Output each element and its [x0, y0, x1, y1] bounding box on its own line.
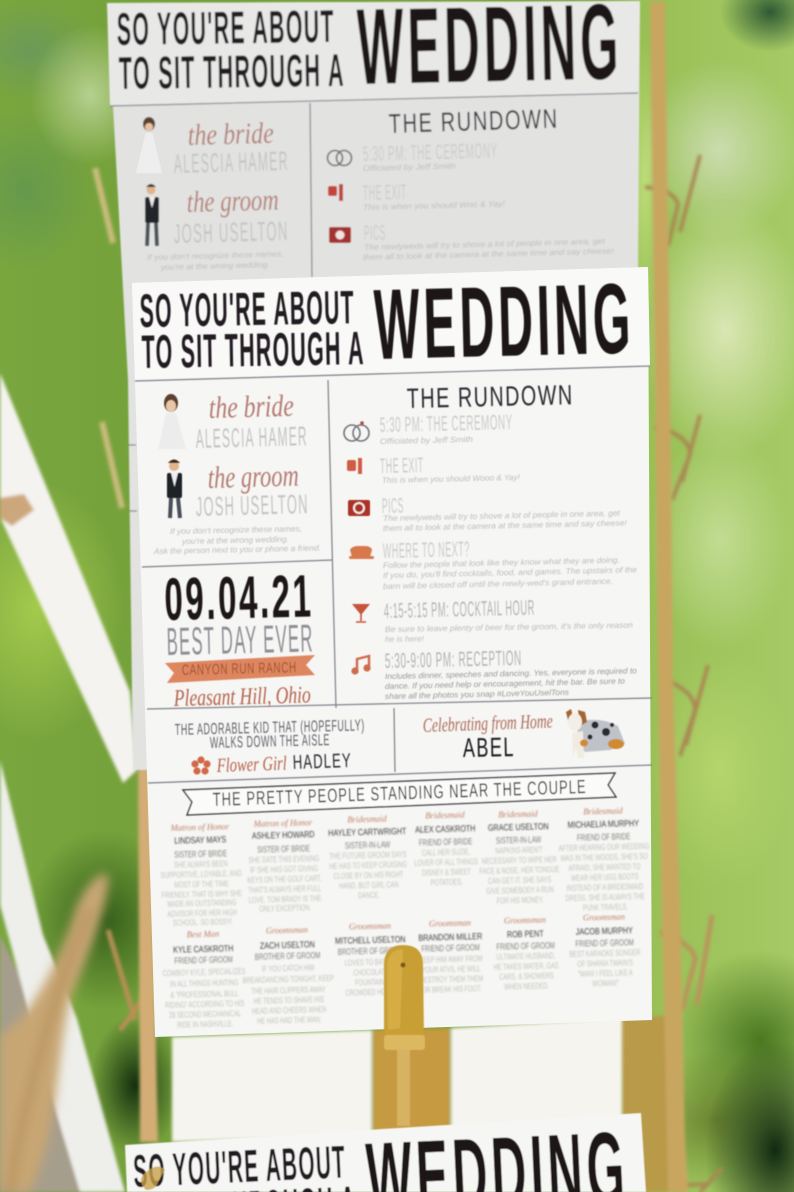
bridesmaid: Hayley: SISTER-IN-LAW: [345, 839, 391, 851]
groomsman: Mitchell: MITCHELL USELTON: [335, 934, 406, 946]
groomsman: Zach: HE HAS HAD THE MAN.: [257, 1014, 322, 1026]
bride and groom names: the bride: [208, 388, 294, 425]
card header band: [132, 267, 650, 381]
groomsman: Brandon: [418, 917, 484, 995]
matron of honor: Lindsay: ADVISOR FOR HER HIGH: [167, 907, 237, 919]
bridesmaid: Hayley: CLOSE BY ON HIS RIGHT: [333, 869, 404, 881]
back card rundown: The newlyweds will try to shove a lot of people in one area, get: [364, 237, 606, 252]
groomsman: Zach: HE TENDS TO SHAVE HIS: [253, 994, 324, 1006]
groomsman: Rob: CARS, & SHOWERS: [499, 970, 554, 982]
venue ribbon: [165, 655, 315, 683]
groomsman: Brandon: KEEP HIM AWAY FROM: [419, 953, 483, 965]
where to next item: barn will be closed off until the newly-wed's grand entrance.: [383, 577, 613, 591]
panel: couple: [153, 388, 321, 556]
groomsman: Rob: HE TAKES WATER, GAS: [493, 960, 559, 972]
bridesmaid: Alex: ALEX CASKROTH: [415, 823, 476, 835]
back card: ALESCIA HAMER: [173, 146, 289, 179]
matron of honor: Ashley: LOVE. TOM BRADY IS THE: [248, 893, 321, 905]
bridesmaid: Grace: Bridesmaid: [498, 808, 538, 820]
best man: Kyle: RIDING" ACCORDING TO HIS: [165, 998, 245, 1010]
cocktail hour item: [384, 597, 634, 644]
side card, lower left: [0, 760, 125, 1192]
groomsman: Zach: [241, 924, 335, 1027]
venue ribbon: CANYON RUN RANCH: [182, 659, 297, 679]
bridesmaid: Michaelia: FRIEND OF BRIDE: [577, 831, 630, 843]
back card bride figure: [135, 117, 163, 174]
icon: bride: [158, 394, 186, 449]
icon: where to next: [349, 546, 374, 559]
best man: Kyle: [161, 928, 247, 1030]
card paper: [132, 267, 652, 1037]
icon: exit: [347, 458, 362, 474]
best man: Kyle: KYLE CASKROTH: [173, 943, 234, 955]
bridesmaid: Alex: DISNEY & SWEET: [422, 866, 471, 878]
white display board: [172, 1018, 622, 1142]
reception item: Includes dinner, speeches and dancing. Yes, everyone is required to: [385, 666, 638, 681]
groomsman: Mitchell: CROWDED HOUSE: [345, 986, 398, 998]
bridesmaid: Michaelia: DRESS. SHE IS ALWAYS THE: [565, 891, 645, 903]
groomsman: Rob: ROB PENT: [507, 929, 544, 940]
best man: Kyle: COWBOY KYLE, SPECIALIZES: [162, 966, 246, 978]
back card groom figure: [145, 184, 159, 246]
back card rundown: PICS: [364, 221, 386, 245]
best man: Kyle: 28 SECOND MECHANICAL: [169, 1008, 241, 1020]
bridesmaid: Grace: CAN GET IT. SHE SAYS: [488, 874, 552, 886]
reception item: dance. If you need help or encouragement, hit the bar. Be sure to: [385, 677, 626, 691]
back card: JOSH USELTON: [173, 216, 289, 249]
panel: flower girl: [175, 717, 365, 777]
groomsman: Mitchell: [335, 920, 407, 998]
groomsman: Brandon: FRIEND OF GROOM: [421, 942, 480, 954]
panel: flower girl: HADLEY: [292, 750, 352, 774]
icon: music note: [353, 656, 369, 673]
back card rundown: Officiated by Jeff Smith: [363, 162, 457, 173]
back card couple names: you're at the wrong wedding.: [160, 260, 270, 272]
bridesmaid: Hayley: DANCE.: [358, 890, 380, 901]
where to next item: Follow the people that look like they know what they are doing.: [383, 556, 620, 570]
wedding party banner: THE PRETTY PEOPLE STANDING NEAR THE COUPLE: [212, 777, 587, 811]
best man: Kyle: FRIEND OF GROOM: [174, 954, 233, 966]
matron of honor: Ashley: ONLY EXCEPTION.: [259, 902, 311, 914]
bridesmaid: Hayley: HAND, BUT GIRL CAN: [339, 879, 399, 891]
panel: celebrating from home: [422, 709, 625, 763]
icon: groom: [167, 460, 182, 518]
bridesmaid: Grace: FOR HIS MONEY.: [497, 894, 544, 906]
groomsman: Rob: ULTIMATE HUSBAND,: [496, 950, 556, 962]
wrong wedding note: If you don't recognize these names,: [170, 524, 302, 536]
bridesmaid: Grace: GIVE SOMEBODY A RUN: [486, 884, 554, 896]
main title: [139, 263, 635, 381]
pics item: [382, 495, 628, 533]
bridesmaid: Alex: LOVER OF ALL THINGS: [414, 856, 478, 868]
back card: [107, 0, 640, 770]
groomsman: Zach: BREAKDANCING TONIGHT, KEEP: [242, 973, 334, 986]
groomsman: Rob: WHEN NEEDED.: [504, 980, 549, 992]
groomsman: Brandon: YOUR ATVS, HE WILL: [422, 963, 481, 975]
pics item: them all to look at the camera at the same time and say cheese!: [383, 518, 628, 533]
bridesmaid: Hayley: [328, 813, 408, 901]
matron of honor: Lindsay: MOST OF THE TIME: [174, 878, 229, 890]
matron of honor: Ashley: [246, 817, 322, 914]
panel: flower girl: THE ADORABLE KID THAT (HOPEFULLY): [175, 717, 365, 739]
back card icon: camera: [329, 227, 351, 243]
icon: flower: [191, 756, 211, 775]
back card header band: [107, 1, 640, 106]
matron of honor: Lindsay: FRIENDLY. THAT IS WHY SHE: [161, 888, 242, 900]
back card rundown: This is when you should Woo & Yay!: [363, 199, 506, 212]
matron of honor: Lindsay: SCHOOL. SO BOSSY!: [173, 916, 232, 928]
bride and groom names: the groom: [207, 458, 299, 495]
exit item: This is when you should Wooo & Yay!: [382, 473, 521, 485]
back card title: TO SIT THROUGH A: [118, 44, 345, 99]
bridesmaid: Michaelia: AFTER HEARING OUR WEDDING: [558, 841, 650, 854]
main title: TO SIT THROUGH A: [141, 321, 365, 378]
groomsman: Zach: HEAD AND CHEERS WHEN: [252, 1004, 326, 1016]
bridesmaid: Grace: FACE & NOSE, HER TONGUE: [479, 864, 560, 876]
panel: the rundown: 5:30 PM: THE CEREMONY: [380, 411, 513, 437]
back card rundown: THE EXIT: [363, 181, 407, 205]
bridesmaid: Grace: SISTER-IN-LAW: [496, 834, 542, 846]
bride and groom names: [195, 388, 309, 522]
panel: date and venue: [164, 562, 315, 712]
best man: Kyle: RIDE IN NASHVILLE.: [177, 1018, 233, 1030]
pics item: PICS: [382, 495, 404, 518]
groomsman: Brandon: OR BREAK HIS FOOT.: [422, 983, 482, 995]
groomsman: Jacob: FRIEND OF GROOM: [575, 937, 634, 949]
bridesmaid: Grace: GRACE USELTON: [488, 821, 549, 833]
panel: wedding party: [159, 805, 651, 1030]
back card couple names: [147, 117, 289, 272]
bamboo post, left: [138, 765, 158, 1142]
back card rundown: [363, 104, 615, 262]
groomsman: Mitchell: BROTHER OF GROOM: [338, 945, 403, 957]
pics item: The newlyweds will try to shove a lot of people in one area, get: [383, 509, 621, 523]
location: Pleasant Hill, Ohio: [173, 682, 311, 712]
back card couple names: the groom: [186, 184, 279, 219]
bridesmaid: Michaelia: [557, 805, 651, 913]
matron of honor: Ashley: SHE DATE THIS EVENING: [248, 853, 320, 865]
panel: flower girl: WALKS DOWN THE AISLE: [210, 732, 330, 752]
wrong wedding note: [153, 524, 321, 556]
groomsman: Jacob: WOMAN!": [592, 977, 619, 989]
cocktail hour item: 4:15-5:15 PM: COCKTAIL HOUR: [384, 597, 535, 623]
where to next item: WHERE TO NEXT?: [383, 538, 470, 563]
groomsman: Brandon: DESTROY THEM THEM: [420, 973, 483, 985]
wrong wedding note: you're at the wrong wedding.: [181, 535, 289, 546]
ceremony item: [380, 411, 513, 446]
bridesmaid: Michaelia: INSTEAD OF A BRIDESMAID: [566, 881, 643, 893]
groomsman: Jacob: [568, 911, 641, 989]
groomsman: Rob: [492, 914, 559, 992]
icon: camera: [348, 500, 370, 516]
groomsman: Zach: BROTHER OF GROOM: [255, 950, 321, 962]
bamboo post, right: [620, 2, 688, 1192]
groomsman: Zach: THE HAIR CLIPPERS AWAY: [251, 984, 326, 996]
back card icon: rings: [328, 150, 352, 166]
wedding party banner: [183, 773, 616, 815]
cocktail hour item: Be sure to leave plenty of beer for the groom, it's the only reason: [385, 621, 634, 634]
matron of honor: Lindsay: [159, 821, 243, 928]
matron of honor: Lindsay: SHE ALWAYS BEEN: [174, 858, 228, 870]
bridesmaid: Michaelia: MICHAELIA MURPHY: [567, 818, 640, 830]
bridesmaid: Hayley: HAYLEY CARTWRIGHT: [328, 826, 406, 838]
bridesmaid: Hayley: Bridesmaid: [347, 813, 387, 825]
panel: flower girl: Flower Girl: [216, 753, 287, 777]
panel: celebrating from home: ABEL: [463, 732, 515, 763]
groomsman: Jacob: OF SHANIA TWAIN'S: [577, 957, 633, 969]
bridesmaid: Alex: [413, 809, 479, 888]
groomsman: Zach: ZACH USELTON: [260, 940, 315, 951]
exit item: [380, 454, 521, 485]
groomsman: Zach: IF YOU CATCH HIM: [262, 962, 314, 974]
groomsman: Rob: FRIEND OF GROOM: [496, 940, 555, 952]
rundown heading: THE RUNDOWN: [406, 379, 574, 414]
bridesmaid: Grace: NAPKINS AREN'T: [495, 844, 543, 856]
bridesmaid: Michaelia: PUNK TRAVELS.: [583, 901, 628, 913]
matron of honor: Ashley: Matron of Honor: [253, 817, 313, 829]
bridesmaid: Alex: FRIEND OF BRIDE: [419, 836, 472, 848]
main wedding program card: BEST DAY EVER: [166, 617, 314, 664]
where to next item: If you do, you'll find cocktails, food, and games. The upstairs of the: [383, 565, 638, 580]
panel: the rundown: [344, 379, 638, 701]
reception item: share all the photos you snap #LoveYouUselTons: [385, 688, 569, 701]
dried twigs behind the cards: [95, 155, 722, 1192]
where to next item: [383, 538, 638, 591]
bridesmaid: Michaelia: Bridesmaid: [583, 805, 623, 817]
side card, upper left: [0, 373, 137, 783]
reception item: 5:30-9:00 PM: RECEPTION: [385, 647, 522, 673]
groomsman: Zach: Groomsman: [266, 924, 309, 936]
back card rundown: THE RUNDOWN: [388, 104, 559, 139]
matron of honor: Lindsay: SUPPORTIVE, LOYABLE, AND: [160, 868, 242, 880]
best man: Kyle: Best Man: [187, 928, 220, 939]
matron of honor: Ashley: ASHLEY HOWARD: [252, 829, 315, 841]
bridesmaid: Alex: POTATOES.: [431, 876, 463, 888]
back card rundown: 5:30 PM: THE CEREMONY: [363, 139, 498, 166]
matron of honor: Lindsay: LINDSAY MAYS: [174, 835, 227, 846]
back card title: [116, 0, 623, 107]
groomsman: Mitchell: FOUNTAINS: [355, 976, 388, 988]
matron of honor: Ashley: KEYS ON THE GOLF CART,: [247, 873, 322, 885]
groomsman: Brandon: Groomsman: [429, 917, 472, 929]
matron of honor: Lindsay: SISTER OF BRIDE: [174, 848, 227, 860]
gold clip: [384, 945, 425, 1126]
main title: SO YOU'RE ABOUT: [139, 280, 355, 337]
bridesmaid: Michaelia: AFRAID, SHE WANTED TO: [568, 861, 641, 873]
wrong wedding note: Ask the person next to you or phone a friend.: [153, 544, 321, 556]
matron of honor: Lindsay: MADE AN OUTSTANDING: [167, 897, 237, 909]
ceremony item: Officiated by Jeff Smith: [380, 435, 474, 446]
bridesmaid: Hayley: HE HAS TO KEEP CRUISING: [329, 859, 407, 871]
back card couple names: the bride: [187, 117, 274, 152]
matron of honor: Ashley: IF SHE HAS GOT GIVING: [250, 863, 318, 875]
bridesmaid: Hayley: THE FUTURE GROOM SAYS: [329, 849, 407, 861]
cocktail hour item: he is here!: [385, 634, 425, 644]
matron of honor: Lindsay: Matron of Honor: [170, 821, 230, 833]
groomsman: Rob: Groomsman: [504, 914, 547, 926]
bridesmaid: Grace: NECESSARY TO WIPE HER: [482, 854, 557, 866]
groomsman: Jacob: JACOB MURPHY: [576, 926, 633, 937]
main wedding program card: ALESCIA HAMER: [195, 421, 308, 454]
groomsman: Jacob: "MAN! I FEEL LIKE A: [578, 967, 633, 979]
groomsman: Mitchell: Groomsman: [349, 920, 392, 932]
bridesmaid: Grace: [478, 808, 560, 906]
back card rundown: them all to look at the camera at the same time and say cheese!: [363, 246, 615, 262]
wheat stalk, lower left: [0, 874, 108, 1192]
best man: Kyle: & "PROFESSIONAL BULL: [170, 988, 239, 1000]
groomsman: Mitchell: CHOCOLATE: [353, 966, 389, 978]
bridesmaid: Michaelia: WEAR HER UGG BOOTS: [571, 871, 639, 883]
groomsman: Mitchell: LOVES TO BATH IN: [344, 956, 397, 968]
bridesmaid: Michaelia: WAS IN THE WOODS, SHE'S SO: [560, 851, 648, 863]
exit item: THE EXIT: [380, 454, 424, 478]
bridesmaid: Alex: CALL HER SUZIE,: [422, 846, 470, 858]
best man: Kyle: IN ALL THINGS HUNTING: [170, 977, 239, 989]
panel: celebrating from home: Celebrating from Home: [422, 710, 553, 737]
icon: rings: [344, 421, 369, 441]
groomsman: Jacob: BEST KARAOKE SONGER: [569, 947, 641, 959]
matron of honor: Ashley: SISTER OF BRIDE: [257, 843, 310, 855]
back card icon: exit: [328, 184, 343, 201]
panel: couple: JOSH USELTON: [195, 489, 309, 522]
back card couple names: If you don't recognize these names,: [147, 249, 284, 262]
bridesmaid: Alex: Bridesmaid: [425, 809, 465, 821]
gold clip smudge: [141, 1166, 165, 1190]
icon: dog: [566, 709, 625, 758]
date: 09.04.21: [164, 562, 314, 633]
groomsman: Jacob: Groomsman: [583, 911, 626, 923]
main wedding program card: [132, 263, 652, 1037]
icon: cocktail: [352, 604, 370, 622]
groomsman: Brandon: BRANDON MILLER: [418, 931, 482, 943]
reception item: [385, 647, 638, 701]
matron of honor: Ashley: THAT'S ALWAYS HER FULL: [248, 883, 321, 895]
